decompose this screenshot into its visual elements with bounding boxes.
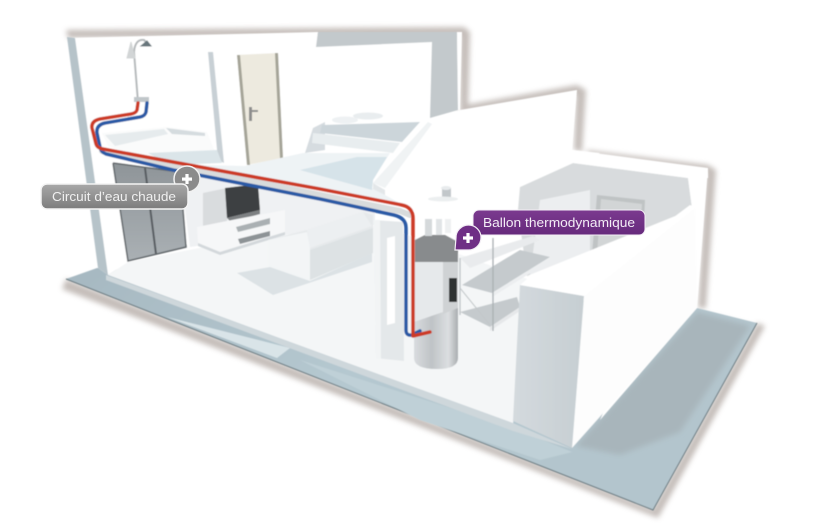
top right grey block: [316, 32, 458, 118]
left wall edge: [67, 37, 108, 275]
sofa: [268, 212, 373, 280]
back wall: [68, 32, 456, 275]
sloped roof section: [373, 90, 600, 217]
bed: [305, 112, 420, 153]
TV stand: [197, 210, 285, 255]
water tank: [414, 219, 458, 369]
door: [237, 53, 283, 165]
label text: Circuit d’eau chaude: [52, 189, 176, 204]
mezzanine slab: [100, 148, 405, 205]
right room door: [590, 195, 645, 278]
callout: Circuit d'eau chaude: [41, 166, 200, 209]
sofa shadow: [237, 253, 372, 295]
inner partition: [208, 52, 224, 163]
duct: [428, 186, 458, 202]
floor edge: [106, 275, 572, 449]
mezzanine shadow: [300, 157, 387, 190]
ground slab: [66, 268, 757, 510]
floor: [108, 225, 530, 424]
label text: Ballon thermodynamique: [483, 215, 635, 230]
slab reflection: [167, 317, 290, 358]
shelving unit: [460, 236, 550, 331]
column: [374, 220, 404, 361]
group: building: [66, 32, 757, 510]
drop shadows: [62, 27, 765, 518]
top right white strip: [457, 32, 462, 110]
blue pipe: [97, 103, 420, 335]
right room back walls: [518, 163, 692, 290]
pipe tray: [102, 151, 410, 215]
shower column: [127, 40, 151, 102]
living room wall: [180, 172, 375, 247]
callout: Ballon thermodynamique: [455, 210, 645, 250]
plus badge, purple: [455, 225, 481, 250]
label pill, purple: [473, 210, 645, 235]
label pill, grey: [41, 184, 188, 209]
slab front edge: [66, 279, 757, 510]
glass patio door: [113, 163, 186, 261]
hot and cold water pipes: [92, 103, 430, 336]
TV: [203, 184, 260, 226]
slab wall shadow: [576, 312, 750, 455]
red pipe: [92, 103, 430, 336]
front wall: [513, 205, 697, 448]
plus badge, grey: [174, 166, 200, 192]
bathroom vanity: [102, 127, 222, 165]
right wall outer top: [572, 150, 708, 178]
